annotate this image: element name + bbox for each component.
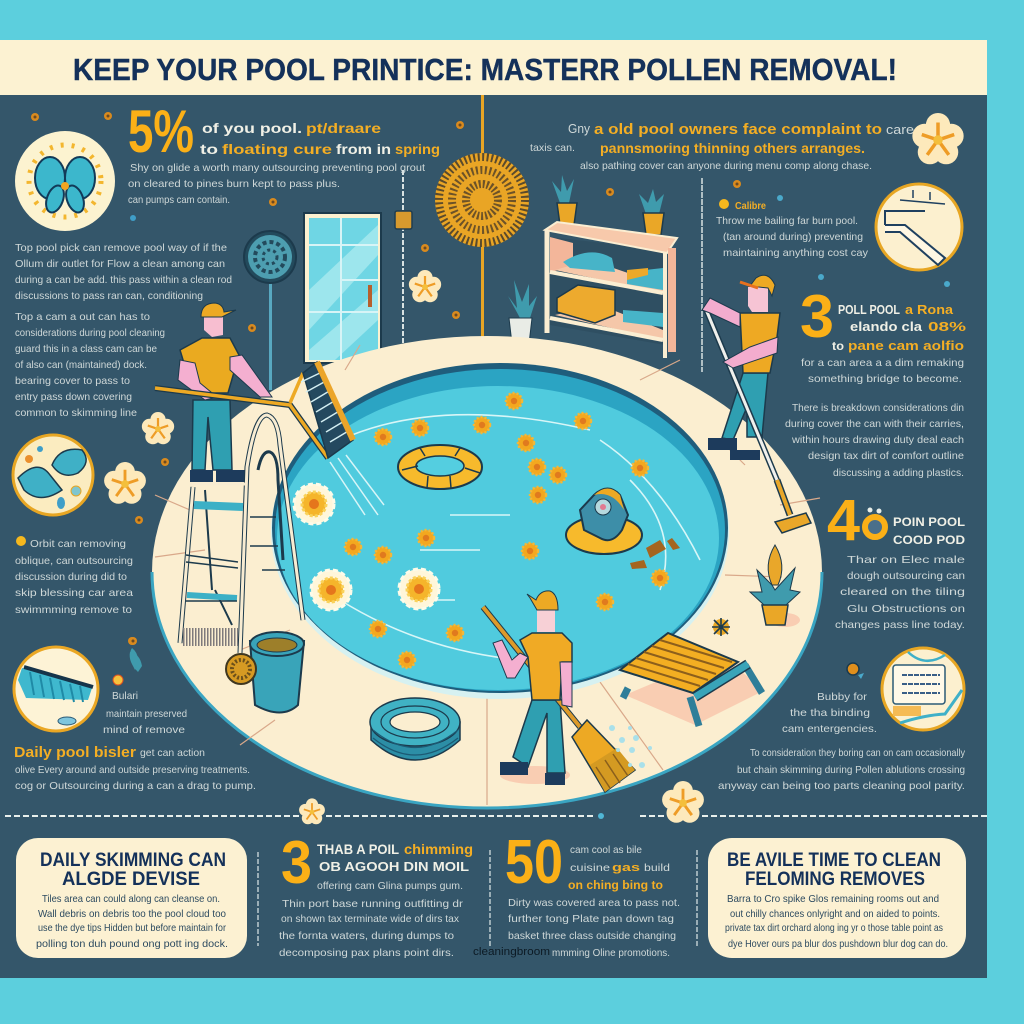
text block: left lower: Orbit can removing [30,538,126,550]
text block: top right callout: a old pool owners face complaint to [594,121,882,138]
text block: near document [782,691,877,735]
text block: right lower paragraph: To consideration they boring can on cam occasionally [750,747,966,759]
statistic: 5% heading: of you pool. [202,120,302,136]
text block: 3 skimming description: the fornta waters, during dumps to [279,930,454,942]
divider [489,850,491,946]
icon: skimmer net on pole [244,231,296,390]
text block: left lower: oblique, can outsourcing [15,555,133,567]
statistic: 3 pool: a Rona [905,302,954,317]
text block: left column paragraphs: Ollum dir outlet for Flow a clean among can [15,258,225,270]
statistic: 50: cuisine [570,862,610,874]
text block: left lower [15,536,133,616]
shelf with towels and box [545,222,677,358]
section divider [5,781,988,824]
card: time to clean [708,838,966,958]
statistic: 50: cam cool as bile [570,844,642,856]
text block: 5% description: can pumps cam contain. [128,194,230,206]
text block: beside brush: mind of remove [103,724,185,736]
statistic: 3 pool: to [832,339,844,353]
title banner [0,40,987,95]
text block: 50 description: mmming Oline promotions. [552,947,670,959]
dust specks by broom [609,725,652,768]
text block: left column paragraphs: of also can (maintained) dock. [15,359,147,371]
text block: left lower: skip blessing car area [15,587,133,599]
pool robot in float ring [566,488,680,569]
card: daily skimming: use the dye tips Hidden but before maintain for [38,922,226,934]
icon: glass door [304,213,381,363]
text block: near document: cam entergencies. [782,723,877,735]
statistic: 3 pool: 3 [800,283,834,350]
text block: beside brush [103,690,187,736]
text block: right column paragraph: within hours drawing duty deal each [791,434,964,446]
statistic: 3 pool: pane cam aolfio [848,338,964,353]
card: time to clean: BE AVILE TIME TO CLEAN [727,850,941,871]
text block: 50 description: basket three class outside changing [508,930,676,942]
text block: top right callout: taxis can. [530,142,575,154]
icon: gold plant on deck [750,545,800,627]
text block: right lower paragraph [718,747,966,792]
statistic: 5% heading: to [200,141,218,157]
text block: daily pool blister: get can action [140,747,205,759]
statistic: 5% heading [128,98,440,165]
divider [257,852,259,946]
card: daily skimming: Tiles area can could along can cleanse on. [42,893,220,905]
water splash under broom [330,455,384,515]
text block: right lower paragraph: anyway can being too parts cleaning pool parity. [718,780,965,792]
statistic: 3 pool: something bridge to become. [808,373,962,385]
card: time to clean: dye Hover ours pa blur dos pushdown blur dog can do. [728,938,948,950]
text block: beside brush: Bulari [112,690,138,702]
donut pool float [398,445,482,489]
floating pollen flowers on water [294,393,668,668]
statistic: 40 pool [827,488,965,553]
text block: top right callout [530,121,914,172]
statistic: 5% heading: 5% [128,98,194,165]
statistic: 3 skimming [281,829,473,896]
icon: flowers left [104,412,174,504]
statistic: 5% heading: pt/draare [306,120,381,136]
text block: left column paragraphs: Top pool pick can remove pool way of if the [15,242,227,254]
statistic: 3 skimming: offering cam Glina pumps gum. [317,880,463,892]
statistic: 3 skimming: 3 [281,829,312,896]
statistic: 5% heading: floating cure [222,141,332,157]
statistic: 3 pool [800,283,967,385]
text block: O-callout: Throw me bailing far burn pool. [716,215,858,227]
icon: pool ladder [180,415,303,653]
card: daily skimming: DAILY SKIMMING CAN [40,850,226,871]
text block: left column paragraphs: considerations during pool cleaning [15,327,165,339]
icon: small flower on deck [712,618,730,636]
text block: left column paragraphs [15,242,232,419]
watermark: cleaningbroom [473,946,550,958]
plant pots [552,175,664,235]
text block: 50 description [508,897,680,959]
icon: brush circle [14,647,98,731]
text block: left column paragraphs: common to skimming line [15,407,137,419]
card: daily skimming: Wall debris on debris too the pool cloud too [38,908,226,920]
text block: daily pool blister: cog or Outsourcing during a can a drag to pump. [15,780,256,792]
icon: flying pollen near brush [113,637,142,685]
icon: coiled hose [370,698,460,760]
icon: document circle [882,648,964,730]
central vertical pole [481,95,484,350]
icon: lantern on dashed line [395,170,412,350]
text block: 3 skimming description: decomposing pax plans point dirs. [279,947,454,959]
text block: right column paragraph: There is breakdown considerations din [792,402,964,414]
text block: right column paragraph: during cover the can with their carries, [785,418,964,430]
text block: daily pool blister: Daily pool bisler [14,744,136,761]
text block: 50 description: Dirty was covered area to pass not. [508,897,680,909]
card: daily skimming: ALGDE DEVISE [62,869,200,890]
icon: skimmer detail circle [876,184,962,270]
text block: 3 skimming description: on shown tax terminate wide of dirs tax [281,913,460,925]
text block: 40 description: Glu Obstructions on [847,603,965,615]
icon: top right blossom [912,113,964,164]
text block: left column paragraphs: Top a cam a out can has to [15,311,150,323]
text block: 3 skimming description [279,898,464,959]
pollen specks on background [31,112,950,674]
statistic: 50: gas [612,862,640,874]
text block: top right callout: care [886,122,914,137]
card: time to clean: Barra to Cro spike Glos remaining rooms out and [727,893,939,905]
icon: left leaves circle [13,435,93,515]
text block: 40 description [835,554,965,631]
statistic: 5% heading: spring [395,141,440,157]
statistic: 3 skimming: chimming [404,841,473,857]
text block: 40 description: changes pass line today. [835,619,965,631]
text block: left column paragraphs: entry pass down covering [15,391,132,403]
text block: beside brush: maintain preserved [106,708,187,720]
statistic: 3 skimming: THAB A POIL [317,841,399,857]
text block: left column paragraphs: during a can be add. this pass within a clean rod [15,274,232,286]
card: daily skimming [16,838,247,958]
text block: 3 skimming description: Thin port base running outfitting dr [282,898,464,910]
icon: lounge bench [620,633,765,726]
statistic: 50 [505,828,670,897]
white planter [508,280,537,344]
icon: cream blossom [409,270,441,302]
card: time to clean: private tax dirt orchard along ing yr o those table point as [725,922,943,934]
text block: 5% description: on cleared to pines burn kept to pass plus. [128,178,340,190]
text block: top right callout: also pathing cover can anyone during menu comp along chase. [580,160,872,172]
text block: 40 description: dough outsourcing can [847,570,965,582]
icon: right worker with pole [702,275,811,533]
text block: O-callout: maintaining anything cost cay [723,247,869,259]
statistic: 50: on ching bing to [568,878,663,892]
icon: sunburst pollen [435,153,529,247]
statistic: 3 skimming: OB AGOOH DIN MOIL [319,859,469,874]
text block: left column paragraphs: guard this in a class cam can be [15,343,157,355]
card: time to clean: FELOMING REMOVES [745,869,925,890]
dashed divider right [701,178,703,372]
icon: bee near document [847,663,864,679]
pool water [271,363,729,699]
text block: top right callout: pannsmoring thinning others arranges. [600,140,865,156]
text block: 5% description [128,162,425,206]
statistic: 40 pool: POIN POOL [893,515,965,529]
statistic: 40 pool: COOD POD [893,533,965,547]
statistic: 5% heading: from in [336,141,391,157]
text block: 50 description: further tong Plate pan down tag [508,913,674,925]
text block: O-callout: Calibre [735,201,766,212]
text block: 40 description: Thar on Elec male [847,554,965,566]
text block: daily pool blister: olive Every around and outside preserving treatments. [15,764,250,776]
text block: O-callout: (tan around during) preventing [723,231,863,243]
text block: daily pool blister [14,744,256,792]
text block: near document: the tha binding [790,707,870,719]
icon: teal flower in cream circle [15,131,115,231]
text block: left column paragraphs: discussions to pass ran can, conditioning [15,290,203,302]
statistic: 3 pool: POLL POOL [838,302,900,317]
text block: left lower: discussion during did to [15,571,127,583]
text block: near document: Bubby for [817,691,868,703]
statistic: 3 pool: for a can area a a dim remaking [801,357,964,369]
text block: 5% description: Shy on glide a worth many outsourcing preventing pool grout [130,162,425,174]
text block: right column paragraph: design tax dirt of comfort outline [808,450,964,462]
statistic: 50: build [644,862,670,874]
text block: top right callout: Gny [568,121,590,136]
text block: right column paragraph [785,402,964,479]
card: time to clean: out chilly chances onlyright and on aided to points. [730,908,940,920]
statistic: 40 pool: 4 [827,488,860,553]
text block: 40 description: cleared on the tiling [840,586,965,598]
text block: right lower paragraph: but chain skimming during Pollen ablutions crossing [737,764,965,776]
statistic: 50: 50 [505,828,563,897]
title banner: KEEP YOUR POOL PRINTICE: MASTERR POLLEN REMOVAL! [73,52,897,87]
statistic: 3 pool: 08% [928,319,967,334]
divider [696,850,698,946]
text block: right column paragraph: discussing a adding plastics. [833,467,964,479]
statistic: 3 pool: elando cla [850,319,923,334]
text block: left column paragraphs: bearing cover to pass to [15,375,130,387]
text block: O-callout [716,199,869,259]
text block: left lower: swimmming remove to [15,604,132,616]
icon: bucket with pollen [226,632,304,712]
icon: left worker with broom [155,303,353,482]
card: daily skimming: polling ton duh pound ong pott ing dock. [36,938,228,950]
icon: bottom worker with broom [483,591,635,792]
pool deck [152,336,822,808]
